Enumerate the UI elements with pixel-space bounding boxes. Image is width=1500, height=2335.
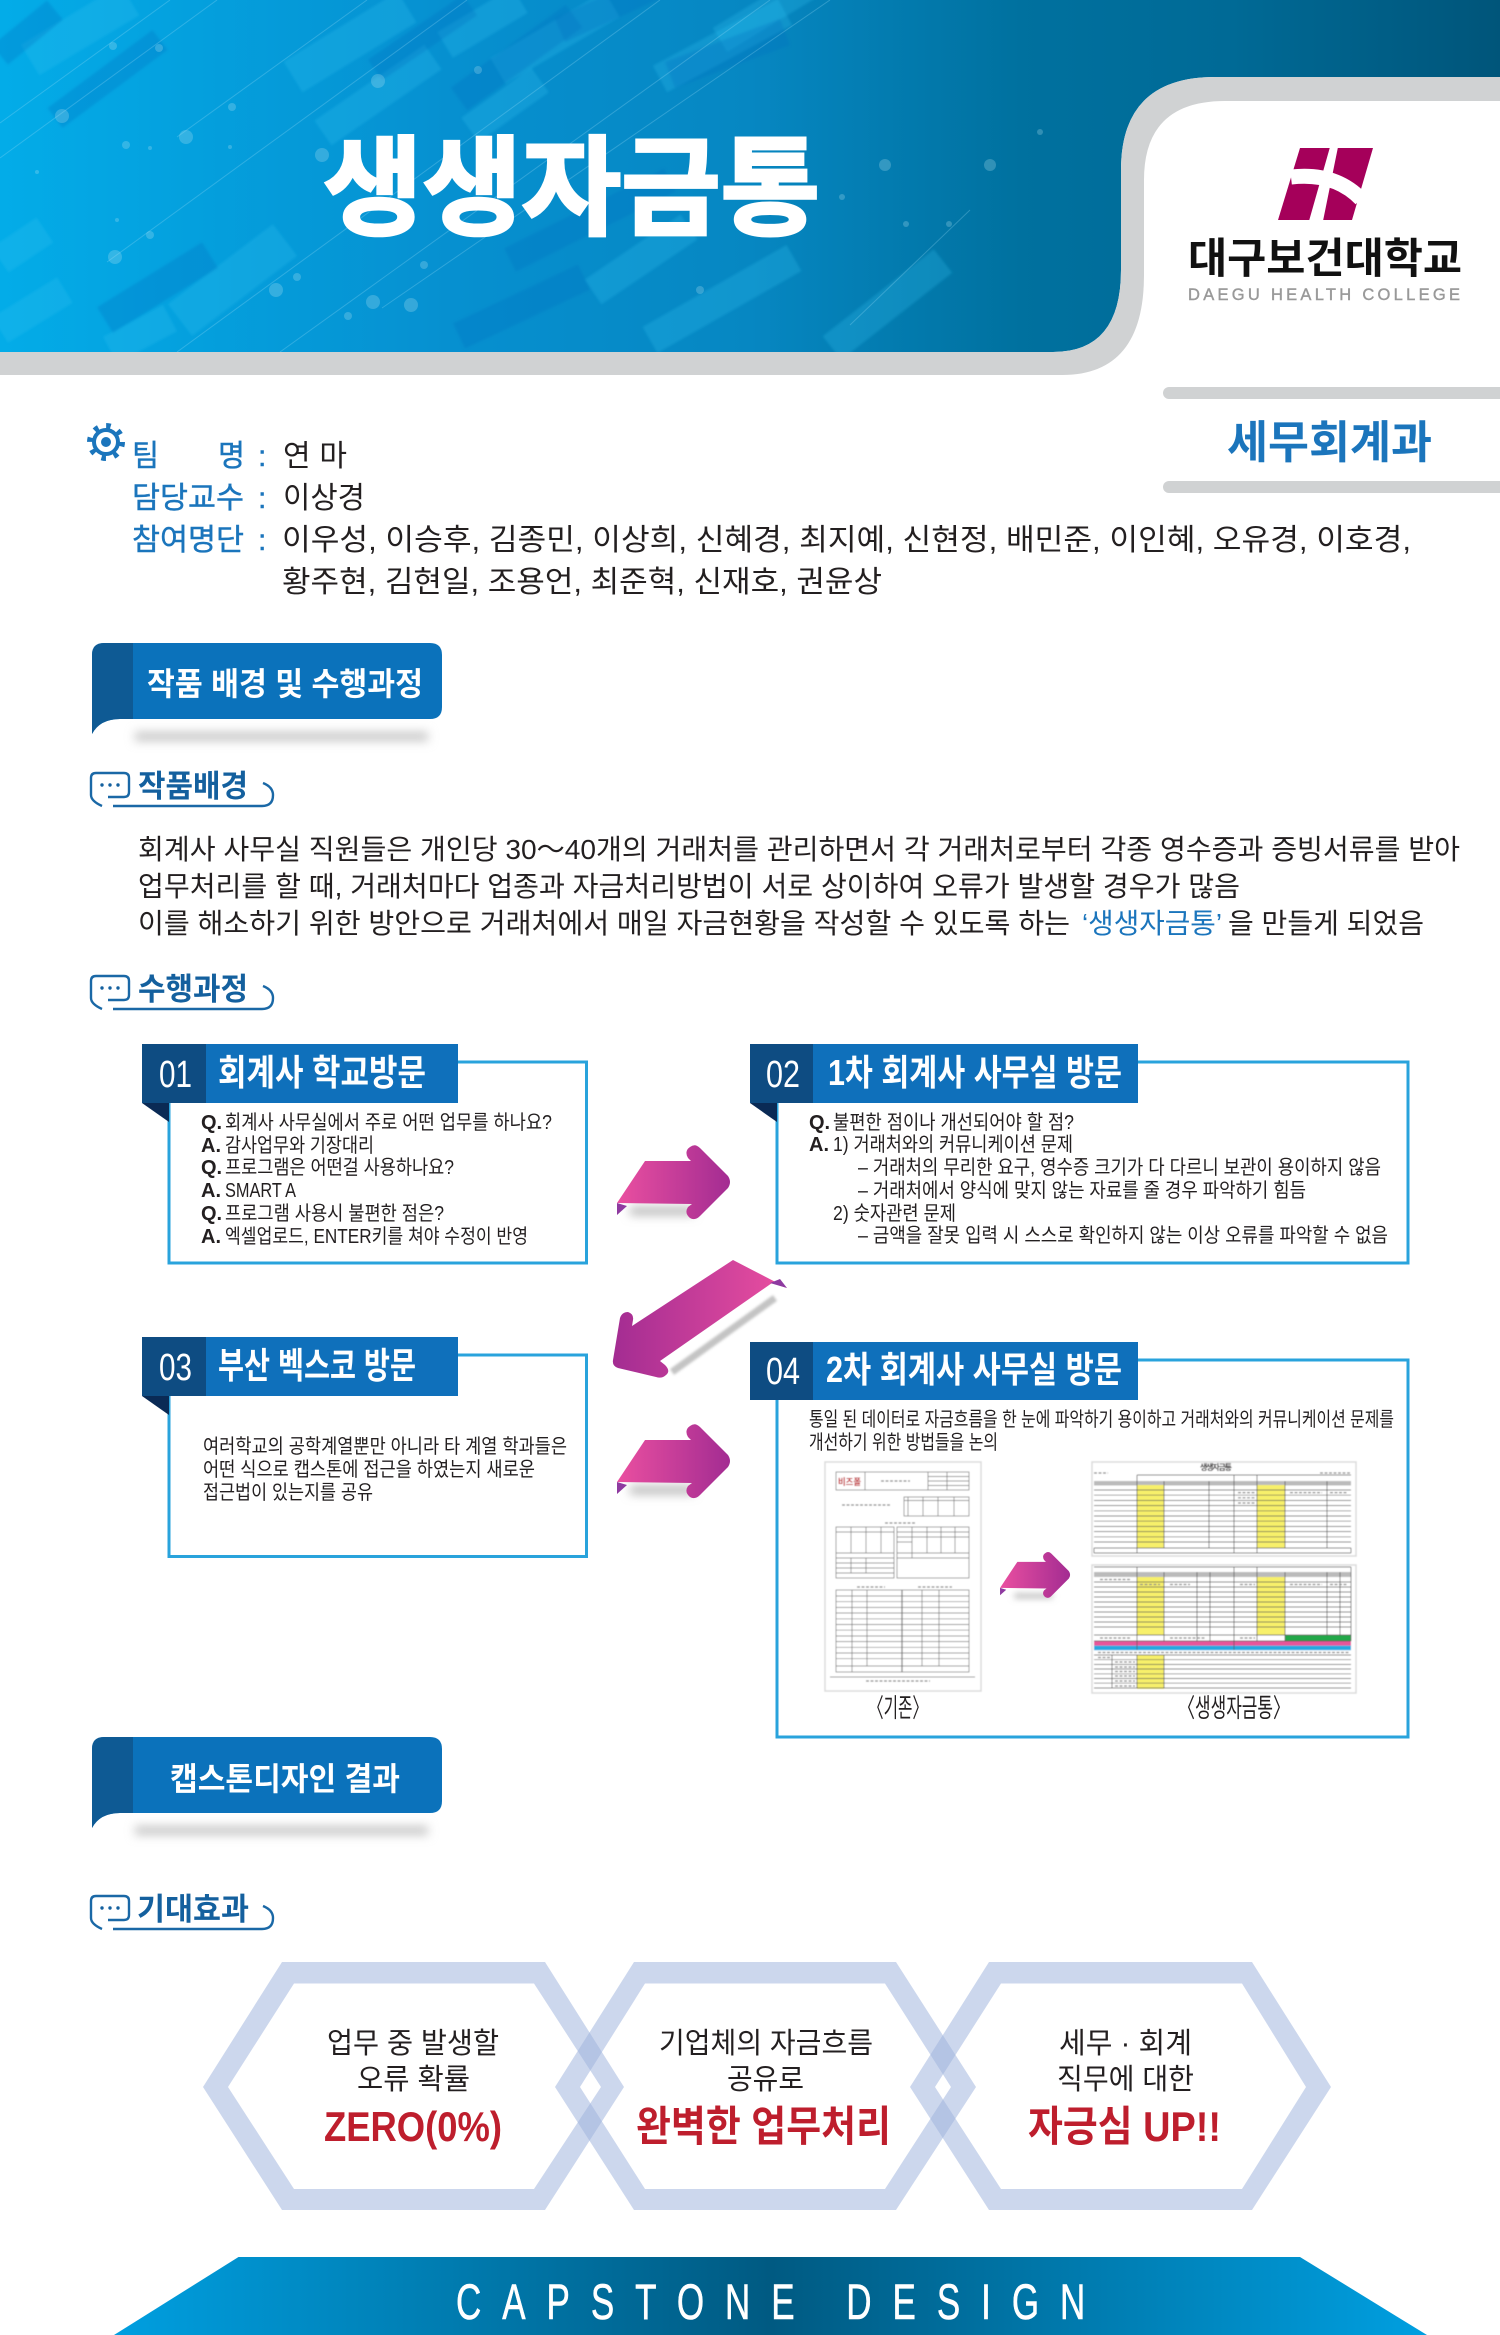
college English name: DAEGU HEALTH COLLEGE xyxy=(1188,286,1460,304)
panel: step 04 xyxy=(750,1342,1408,1737)
effect text: 자긍심 UP!! xyxy=(1028,2103,1221,2150)
questions and answers: 프로그램은 어떤걸 사용하나요? xyxy=(225,1156,454,1179)
professor row: 담당교수 xyxy=(132,482,244,515)
spreadsheet title: 생생자금통 xyxy=(1200,1462,1232,1472)
arrow: before to after xyxy=(1000,1552,1070,1598)
step number: 02 xyxy=(766,1054,800,1096)
college name: 대구보건대학교 xyxy=(1188,235,1462,282)
caption: new tool: 〈생생자금통〉 xyxy=(1178,1693,1290,1723)
effect text: 업무 중 발생할 xyxy=(327,2027,499,2060)
professor row: 이상경 xyxy=(283,482,365,515)
effect text: ZERO(0%) xyxy=(324,2103,502,2150)
effect text: 오류 확률 xyxy=(357,2063,470,2096)
step title: 부산 벡스코 방문 xyxy=(218,1345,416,1386)
arrow: step 02 to step 03 xyxy=(613,1260,787,1378)
background paragraph: 회계사 사무실 직원들은 개인당 30～40개의 거래처를 관리하면서 각 거래처로부터 각종 영수증과 증빙서류를 받아 xyxy=(138,834,1460,865)
spreadsheet bottom xyxy=(1092,1565,1356,1693)
questions and answers: Q. xyxy=(201,1157,222,1179)
effect text: 세무 · 회계 xyxy=(1059,2027,1192,2060)
header banner xyxy=(0,0,1500,352)
footer text: CAPSTONE DESIGN xyxy=(456,2275,1085,2331)
team name row: 팀 xyxy=(132,440,159,473)
icon: college emblem xyxy=(1278,147,1373,221)
step number: 04 xyxy=(766,1351,800,1393)
step number: 03 xyxy=(159,1347,192,1389)
header grey frame xyxy=(0,77,1500,375)
team info xyxy=(90,426,1411,599)
questions and answers: – 금액을 잘못 입력 시 스스로 확인하지 않는 이상 오류를 파악할 수 없음 xyxy=(858,1224,1388,1247)
footer banner xyxy=(114,2257,1427,2335)
participants row: 참여명단 xyxy=(132,524,244,557)
spreadsheet top xyxy=(1092,1462,1356,1556)
background paragraph: 이를 해소하기 위한 방안으로 거래처에서 매일 자금현황을 작성할 수 있도록 하는 xyxy=(138,908,1070,939)
participants row: 황주현, 김현일, 조용언, 최준혁, 신재호, 권윤상 xyxy=(282,566,882,599)
questions and answers: – 거래처의 무리한 요구, 영수증 크기가 다 다르니 보관이 용이하지 않음 xyxy=(858,1156,1381,1179)
subheading: expected effects xyxy=(91,1892,273,1929)
team name row: : xyxy=(258,440,266,473)
panel: step 03 xyxy=(142,1337,586,1556)
panel: step 02 xyxy=(750,1044,1408,1263)
effect text: 공유로 xyxy=(727,2064,804,2096)
questions and answers: A. xyxy=(201,1180,221,1202)
vendor mark on form: 비즈폴 xyxy=(838,1476,861,1487)
step description: 여러학교의 공학계열뿐만 아니라 타 계열 학과들은 xyxy=(203,1435,567,1458)
effect text xyxy=(1028,2027,1221,2150)
questions and answers: 1) 거래처와의 커뮤니케이션 문제 xyxy=(833,1133,1073,1156)
step description xyxy=(203,1435,567,1504)
questions and answers: 엑셀업로드, ENTER키를 쳐야 수정이 반영 xyxy=(225,1225,528,1248)
questions and answers: 2) 숫자관련 문제 xyxy=(833,1202,956,1225)
panel: step 01 xyxy=(142,1044,586,1263)
background paragraph: 업무처리를 할 때, 거래처마다 업종과 자금처리방법이 서로 상이하여 오류가 발생할 경우가 많음 xyxy=(138,871,1240,902)
effect text: 완벽한 업무처리 xyxy=(636,2103,891,2150)
section banner: capstone result xyxy=(92,1737,442,1835)
subheading: process xyxy=(91,972,273,1009)
subheading text: 기대효과 xyxy=(137,1892,249,1927)
participants row: : xyxy=(258,524,266,557)
questions and answers: SMART A xyxy=(225,1180,297,1202)
section banner: background and process xyxy=(92,643,442,741)
questions and answers: A. xyxy=(809,1134,829,1156)
icon: gear xyxy=(90,426,122,458)
subheading: background xyxy=(91,769,273,806)
questions and answers: 회계사 사무실에서 주로 어떤 업무를 하나요? xyxy=(225,1111,552,1134)
panel: effect 1 xyxy=(203,1962,624,2210)
participants row xyxy=(132,524,1411,599)
questions and answers: Q. xyxy=(201,1112,222,1134)
section banner title: 작품 배경 및 수행과정 xyxy=(147,666,423,702)
questions and answers: – 거래처에서 양식에 맞지 않는 자료를 줄 경우 파악하기 힘듬 xyxy=(858,1179,1306,1202)
effect text: 직무에 대한 xyxy=(1057,2063,1194,2096)
step number: 01 xyxy=(159,1054,192,1096)
subheading text: 수행과정 xyxy=(138,972,248,1007)
step description: 어떤 식으로 캡스톤에 접근을 하였는지 새로운 xyxy=(203,1458,535,1481)
questions and answers xyxy=(809,1111,1388,1247)
existing form document xyxy=(825,1462,981,1691)
department name: 세무회계과 xyxy=(1227,417,1432,468)
arrow: step 01 to step 02 xyxy=(617,1145,730,1219)
caption: existing: 〈기존〉 xyxy=(868,1693,928,1723)
effect text: 기업체의 자금흐름 xyxy=(659,2027,873,2060)
logo: Daegu Health College xyxy=(1188,147,1462,304)
participants row: 이우성, 이승후, 김종민, 이상희, 신혜경, 최지예, 신현정, 배민준, 이인혜, 오유경, 이호경, xyxy=(282,524,1411,557)
department label xyxy=(1163,387,1500,493)
step description: 개선하기 위한 방법들을 논의 xyxy=(809,1431,998,1454)
effect text xyxy=(324,2027,502,2150)
questions and answers: 프로그램 사용시 불편한 점은? xyxy=(225,1202,444,1225)
section banner title: 캡스톤디자인 결과 xyxy=(170,1761,400,1797)
professor row xyxy=(132,482,365,515)
background paragraph xyxy=(138,834,1460,939)
professor row: : xyxy=(258,482,266,515)
panel: effect 2 xyxy=(555,1962,976,2210)
questions and answers: 불편한 점이나 개선되어야 할 점? xyxy=(833,1111,1074,1134)
subheading text: 작품배경 xyxy=(138,769,248,804)
questions and answers: Q. xyxy=(809,1112,830,1134)
questions and answers xyxy=(201,1111,552,1248)
background paragraph: ‘생생자금통’ xyxy=(1082,908,1222,939)
step title: 1차 회계사 사무실 방문 xyxy=(828,1052,1122,1093)
step title: 회계사 학교방문 xyxy=(218,1052,426,1093)
arrow: step 03 to step 04 xyxy=(617,1424,730,1498)
background paragraph: 을 만들게 되었음 xyxy=(1228,908,1424,939)
questions and answers: Q. xyxy=(201,1203,222,1225)
team name row: 연 마 xyxy=(283,440,347,473)
team name row xyxy=(132,440,347,473)
panel: effect 3 xyxy=(910,1962,1331,2210)
step title: 2차 회계사 사무실 방문 xyxy=(826,1349,1122,1390)
step description: 접근법이 있는지를 공유 xyxy=(203,1481,373,1504)
questions and answers: 감사업무와 기장대리 xyxy=(225,1134,374,1157)
effect text xyxy=(636,2027,891,2150)
team name row: 명 xyxy=(218,440,245,473)
questions and answers: A. xyxy=(201,1135,221,1157)
step description xyxy=(809,1408,1394,1454)
title: 생생자금통 xyxy=(323,128,820,249)
questions and answers: A. xyxy=(201,1226,221,1248)
